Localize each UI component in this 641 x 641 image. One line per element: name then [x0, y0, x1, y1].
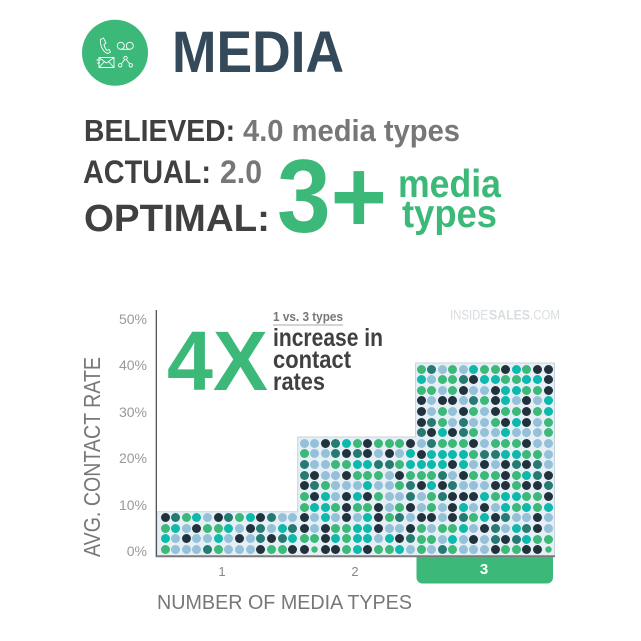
actual line: 2.0 [220, 154, 262, 190]
big 4X figure: 4X [167, 314, 268, 408]
x axis title: NUMBER OF MEDIA TYPES [157, 591, 412, 614]
x axis labels: 1 [218, 564, 226, 579]
icon: media types badge [82, 20, 148, 86]
believed line: BELIEVED: [84, 113, 235, 148]
believed line: 4.0 media types [243, 113, 460, 148]
chart axes [156, 310, 555, 557]
x axis labels: 2 [351, 564, 359, 579]
x axis labels: 3 [480, 561, 488, 578]
brand wordmark: SALES [489, 308, 530, 322]
actual line: ACTUAL: [83, 154, 211, 190]
y axis tick labels [119, 311, 147, 559]
y axis title: AVG. CONTACT RATE [79, 357, 105, 557]
y axis tick labels: 30% [119, 404, 147, 420]
increase text: rates [273, 368, 325, 396]
believed line [84, 113, 460, 148]
step background of the bars [157, 363, 554, 556]
media types callout: types [402, 193, 497, 236]
x axis labels [218, 561, 488, 579]
bar: 3 media types dots [417, 365, 553, 554]
comparison label: 1 vs. 3 types [273, 309, 343, 324]
highlighted tab for 3 types [416, 557, 553, 584]
brand wordmark: INSIDE [450, 308, 488, 322]
brand wordmark: .COM [530, 308, 560, 322]
y axis tick labels: 10% [119, 497, 147, 513]
optimal line: OPTIMAL: [84, 198, 270, 240]
increase text [273, 324, 383, 396]
bar: 2 media types dots [300, 439, 415, 554]
brand wordmark [450, 308, 560, 322]
bar: 1 media type dots [161, 513, 297, 554]
big 3+ figure: 3+ [277, 139, 387, 255]
title: MEDIA [172, 20, 344, 85]
y axis tick labels: 20% [119, 450, 147, 466]
increase text: increase in [273, 324, 383, 352]
increase text: contact [273, 346, 352, 374]
y axis tick labels: 40% [119, 357, 147, 373]
media types callout: media [398, 163, 501, 206]
media types callout [398, 163, 501, 236]
y axis tick labels: 50% [119, 311, 147, 327]
y axis tick labels: 0% [127, 543, 147, 559]
